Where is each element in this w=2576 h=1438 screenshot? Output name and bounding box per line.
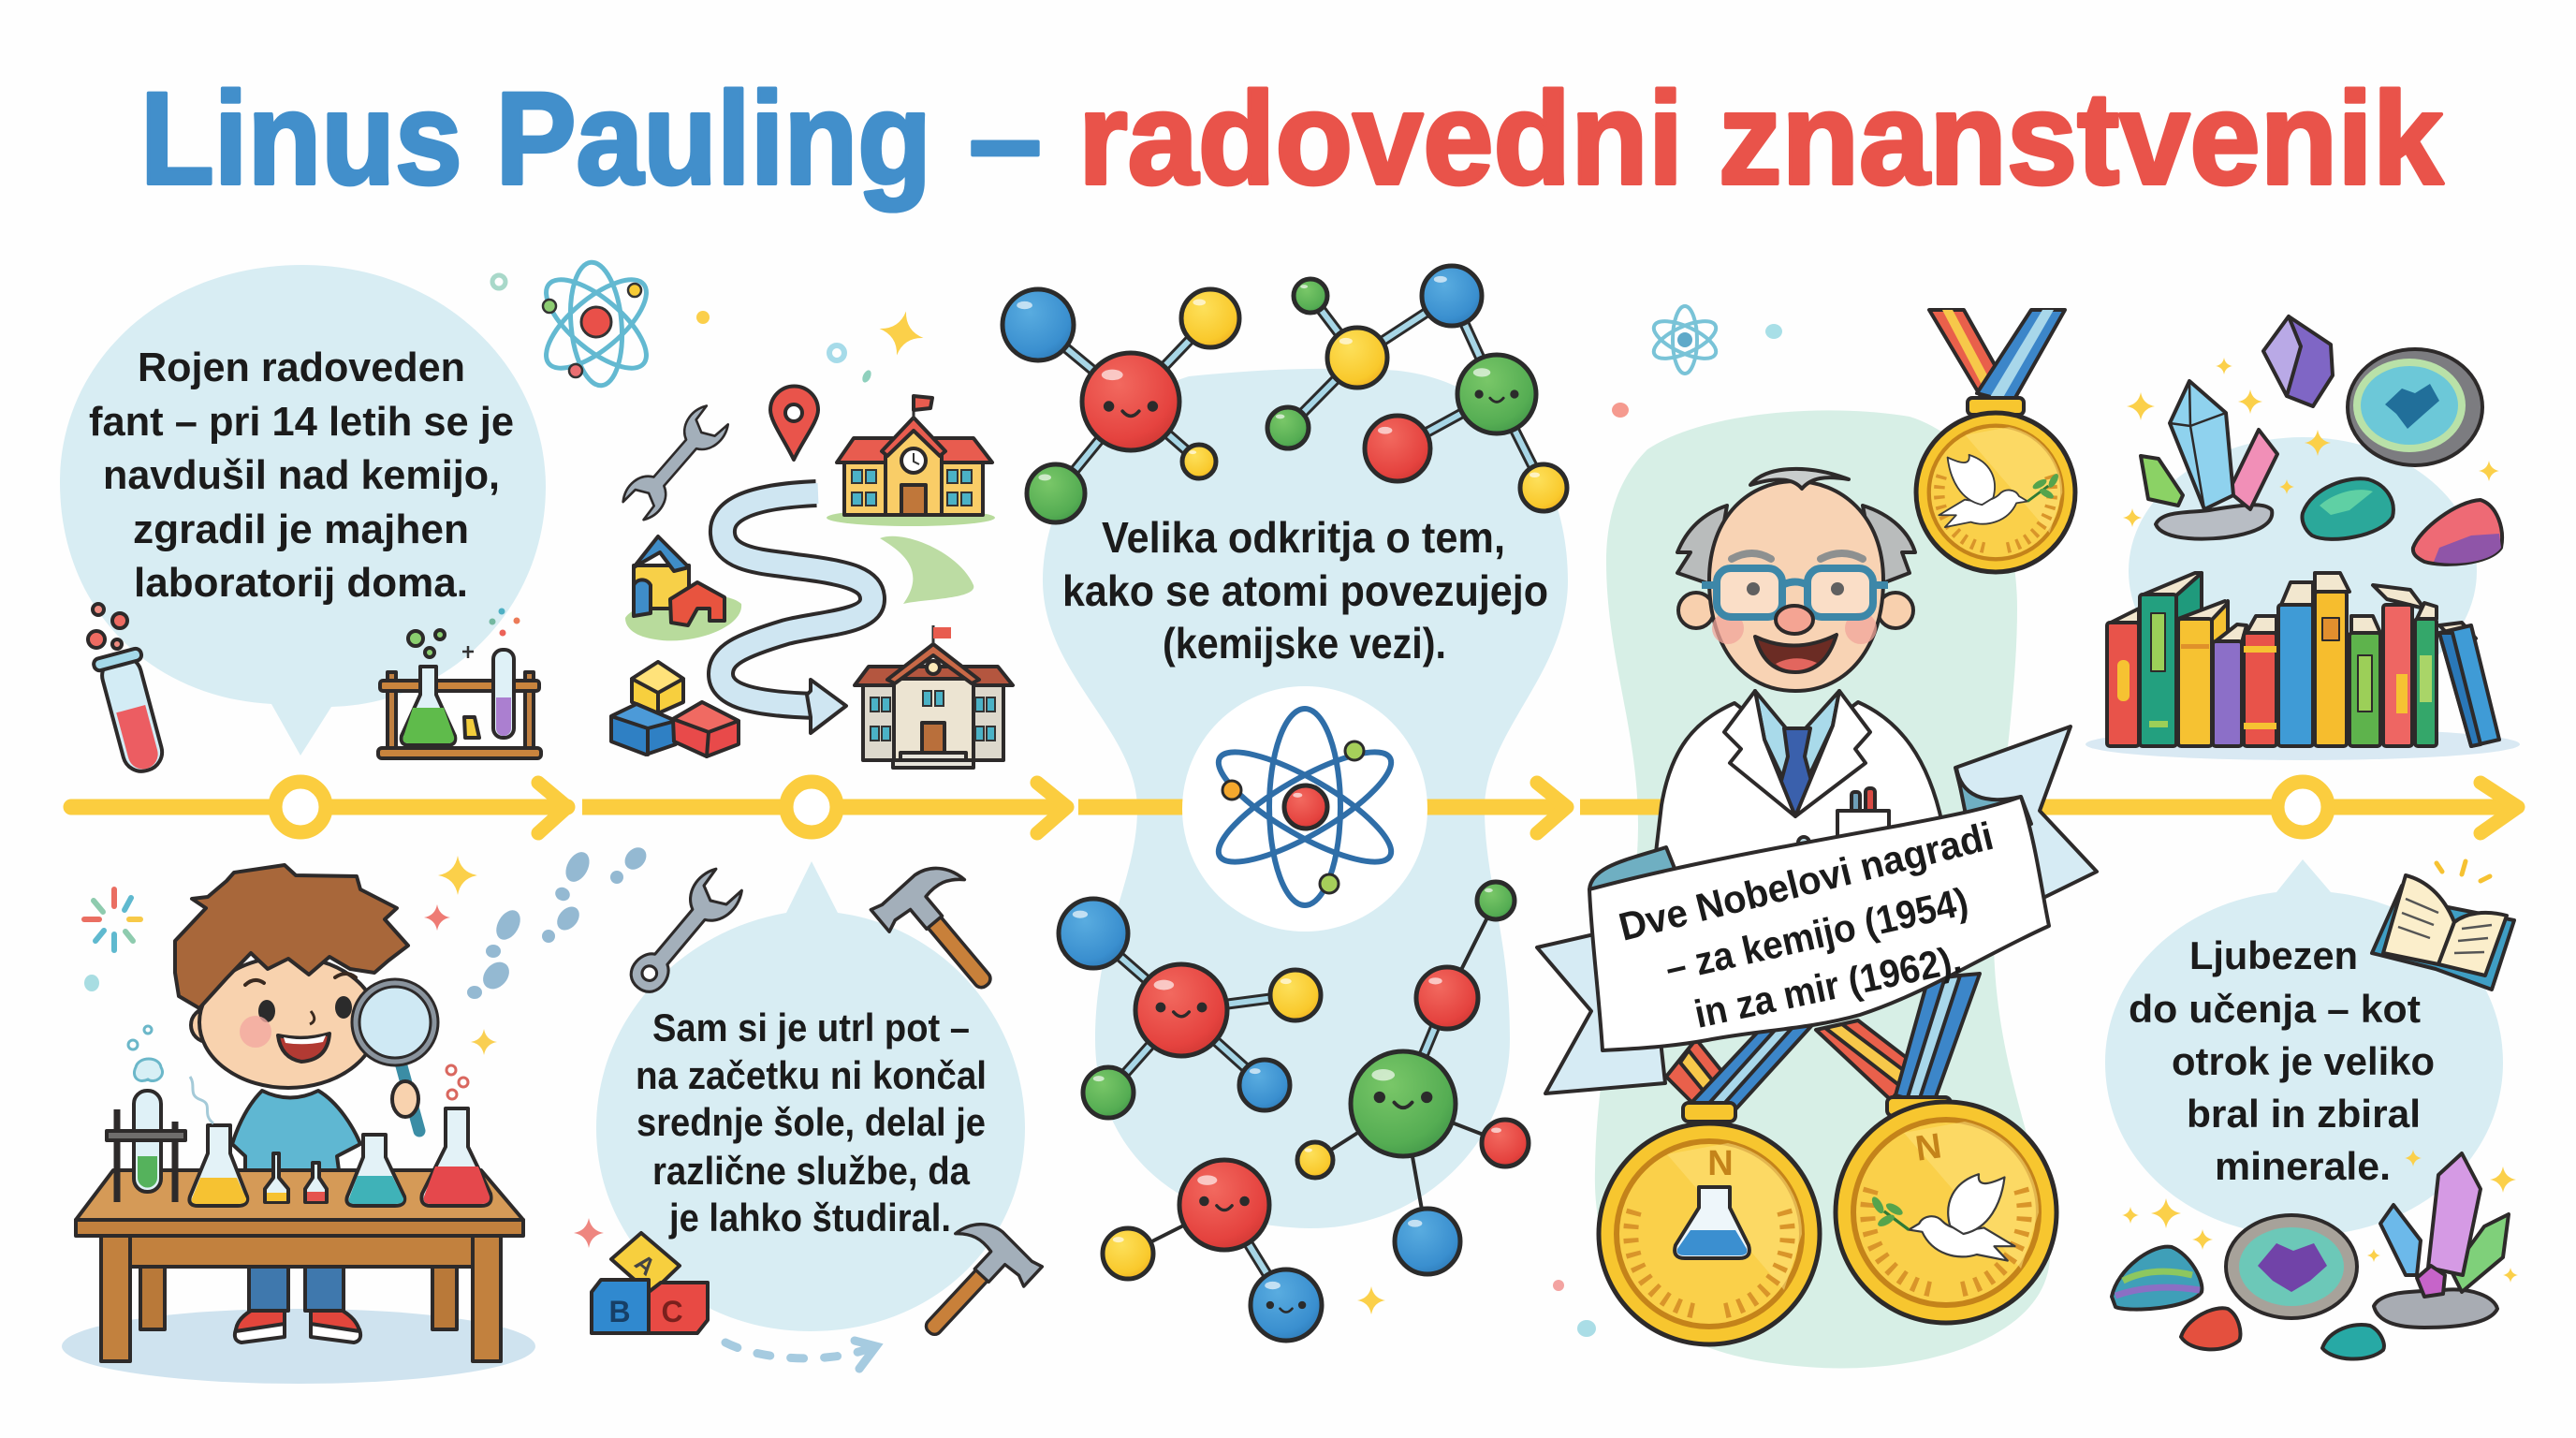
icon: green path patches	[880, 536, 973, 604]
text: bubble 1: fant – pri 14 letih se je	[89, 399, 514, 445]
title	[140, 65, 2443, 212]
pocket with pen	[1798, 788, 1889, 862]
icon: crystals top	[2141, 381, 2277, 539]
icon: central atom	[1182, 686, 1427, 932]
molecule lower right	[1297, 882, 1529, 1274]
lab coat	[1649, 702, 1961, 908]
icon: blue geode	[2348, 349, 2482, 465]
teal stone	[2322, 1325, 2384, 1359]
panel: bubble over books	[2129, 437, 2477, 705]
ribbons of lower medals	[1666, 974, 1980, 1123]
icon: winding road arrow	[721, 493, 872, 733]
text: bubble 3 bonds: (kemijske vezi).	[1163, 619, 1446, 668]
icon: wrench	[621, 865, 746, 1002]
flask red	[421, 1108, 491, 1206]
ground shadow	[62, 1309, 535, 1384]
icon: ABC blocks: C	[661, 1295, 683, 1328]
flask yellow	[189, 1125, 247, 1206]
icon: test tube	[88, 604, 170, 777]
text: bubble 5: minerale.	[2215, 1144, 2391, 1188]
panel: bubble 2 self-made path	[596, 861, 1025, 1331]
text: bubble 1	[89, 345, 514, 606]
icon: footprints	[467, 844, 651, 999]
icon: boy with magnifier at lab table	[62, 865, 535, 1384]
striped stone	[2112, 1247, 2202, 1310]
text: bubble 2: na začetku ni končal	[636, 1053, 987, 1097]
text: bubble 1: laboratorij doma.	[134, 560, 468, 606]
timeline node 1	[275, 782, 326, 832]
magnifier	[356, 983, 434, 1131]
text: bubble 3 bonds	[1062, 513, 1548, 668]
text: banner	[1615, 814, 1998, 1036]
molecule bottom	[1103, 1160, 1322, 1341]
text: banner: Dve Nobelovi nagradi	[1615, 814, 1998, 949]
molecule top left	[1003, 289, 1239, 522]
sparkles top right	[2123, 358, 2499, 527]
medal: peace: N	[1913, 1126, 1944, 1169]
icon: hammer	[871, 851, 1026, 1011]
boy legs and shoes	[235, 1255, 360, 1343]
panel: bubble 1 birth	[60, 265, 546, 756]
icon: wrench top	[619, 403, 732, 523]
molecule top right	[1267, 266, 1567, 511]
title: Linus Pauling	[140, 65, 931, 212]
text: bubble 3 bonds: kako se atomi povezujejo	[1062, 566, 1548, 615]
icon: rainbow stone	[2413, 500, 2502, 565]
icon: green stone	[2302, 478, 2393, 539]
text: bubble 2: različne službe, da	[652, 1149, 971, 1193]
text: bubble 2: je lahko študiral.	[668, 1196, 951, 1240]
text: bubble 5: bral in zbiral	[2187, 1092, 2421, 1136]
text: bubble 5: Ljubezen	[2189, 933, 2358, 977]
text: bubble 3 bonds: Velika odkritja o tem,	[1102, 513, 1505, 562]
decorative dots and star top left	[492, 275, 928, 384]
icon: hammer lower	[894, 1208, 1042, 1358]
icon: small atom	[533, 260, 660, 388]
icon: pink plus	[574, 1218, 604, 1248]
boy head	[175, 865, 408, 1088]
icon: minerals bottom	[2112, 1153, 2509, 1359]
decorative sparkles around boy	[84, 856, 497, 1055]
icon: open book	[2372, 861, 2514, 990]
timeline node 5	[2277, 782, 2328, 832]
icon: school	[827, 396, 995, 526]
icon: university	[855, 625, 1013, 768]
red stone	[2181, 1308, 2241, 1349]
icon: lab rack	[378, 609, 541, 758]
text: banner: in za mir (1962).	[1690, 937, 1966, 1036]
dashed arrow	[725, 1341, 876, 1369]
icon: map pin	[770, 387, 818, 460]
icon: ABC blocks: A	[630, 1248, 661, 1281]
text: bubble 1: navdušil nad kemijo,	[103, 452, 500, 498]
test tube stand	[107, 1091, 185, 1202]
text: banner: – za kemijo (1954)	[1661, 879, 1972, 990]
text: bubble 2: Sam si je utrl pot –	[652, 1005, 970, 1049]
panel: bubble 5 learning	[2105, 859, 2503, 1236]
medal: chemistry: N	[1707, 1144, 1734, 1183]
icon: purple gem	[2263, 316, 2333, 406]
books shadow	[2086, 728, 2520, 760]
text: bubble 1: zgradil je majhen	[133, 506, 469, 552]
icon: cubes	[611, 662, 739, 756]
text: bubble 5: do učenja – kot	[2129, 987, 2421, 1031]
glasses	[1702, 568, 1888, 617]
icon: ABC blocks: B	[608, 1295, 631, 1328]
medal: top with dove	[1916, 310, 2075, 572]
molecule lower left	[1059, 899, 1321, 1118]
text: bubble 2	[636, 1005, 987, 1240]
text: bubble 5: otrok je veliko	[2172, 1039, 2435, 1083]
purple geode	[2226, 1215, 2357, 1318]
panel: chemical bonds blob backgrounds	[1043, 369, 2050, 1369]
table	[76, 1170, 523, 1361]
small bottles	[265, 1153, 327, 1202]
crystal cluster	[2374, 1153, 2509, 1328]
icon: books	[2107, 573, 2499, 746]
boy shirt	[232, 1091, 360, 1170]
title: –	[969, 65, 1042, 212]
text: bubble 1: Rojen radoveden	[138, 345, 465, 390]
medal: chemistry	[1599, 1103, 1820, 1344]
timeline arrows	[71, 783, 2518, 833]
steam and bubbles	[128, 1026, 468, 1123]
shirt and tie	[1724, 691, 1870, 816]
text: bubble 5	[2129, 933, 2435, 1188]
title: radovedni znanstvenik	[1078, 65, 2443, 212]
icon: scientist	[1649, 469, 1961, 908]
banner: Nobel prizes	[1537, 726, 2097, 1093]
timeline node 2	[786, 782, 837, 832]
icon: ABC blocks	[592, 1233, 708, 1333]
text: bubble 2: srednje šole, delal je	[637, 1100, 986, 1144]
sparkles bottom right	[2122, 1150, 2518, 1283]
head	[1677, 469, 1915, 691]
decorative small atom and dots near scientist	[1357, 306, 1782, 1337]
icon: toy blocks house	[625, 536, 741, 640]
medal: peace	[1836, 1097, 2056, 1323]
flask teal	[346, 1135, 404, 1206]
